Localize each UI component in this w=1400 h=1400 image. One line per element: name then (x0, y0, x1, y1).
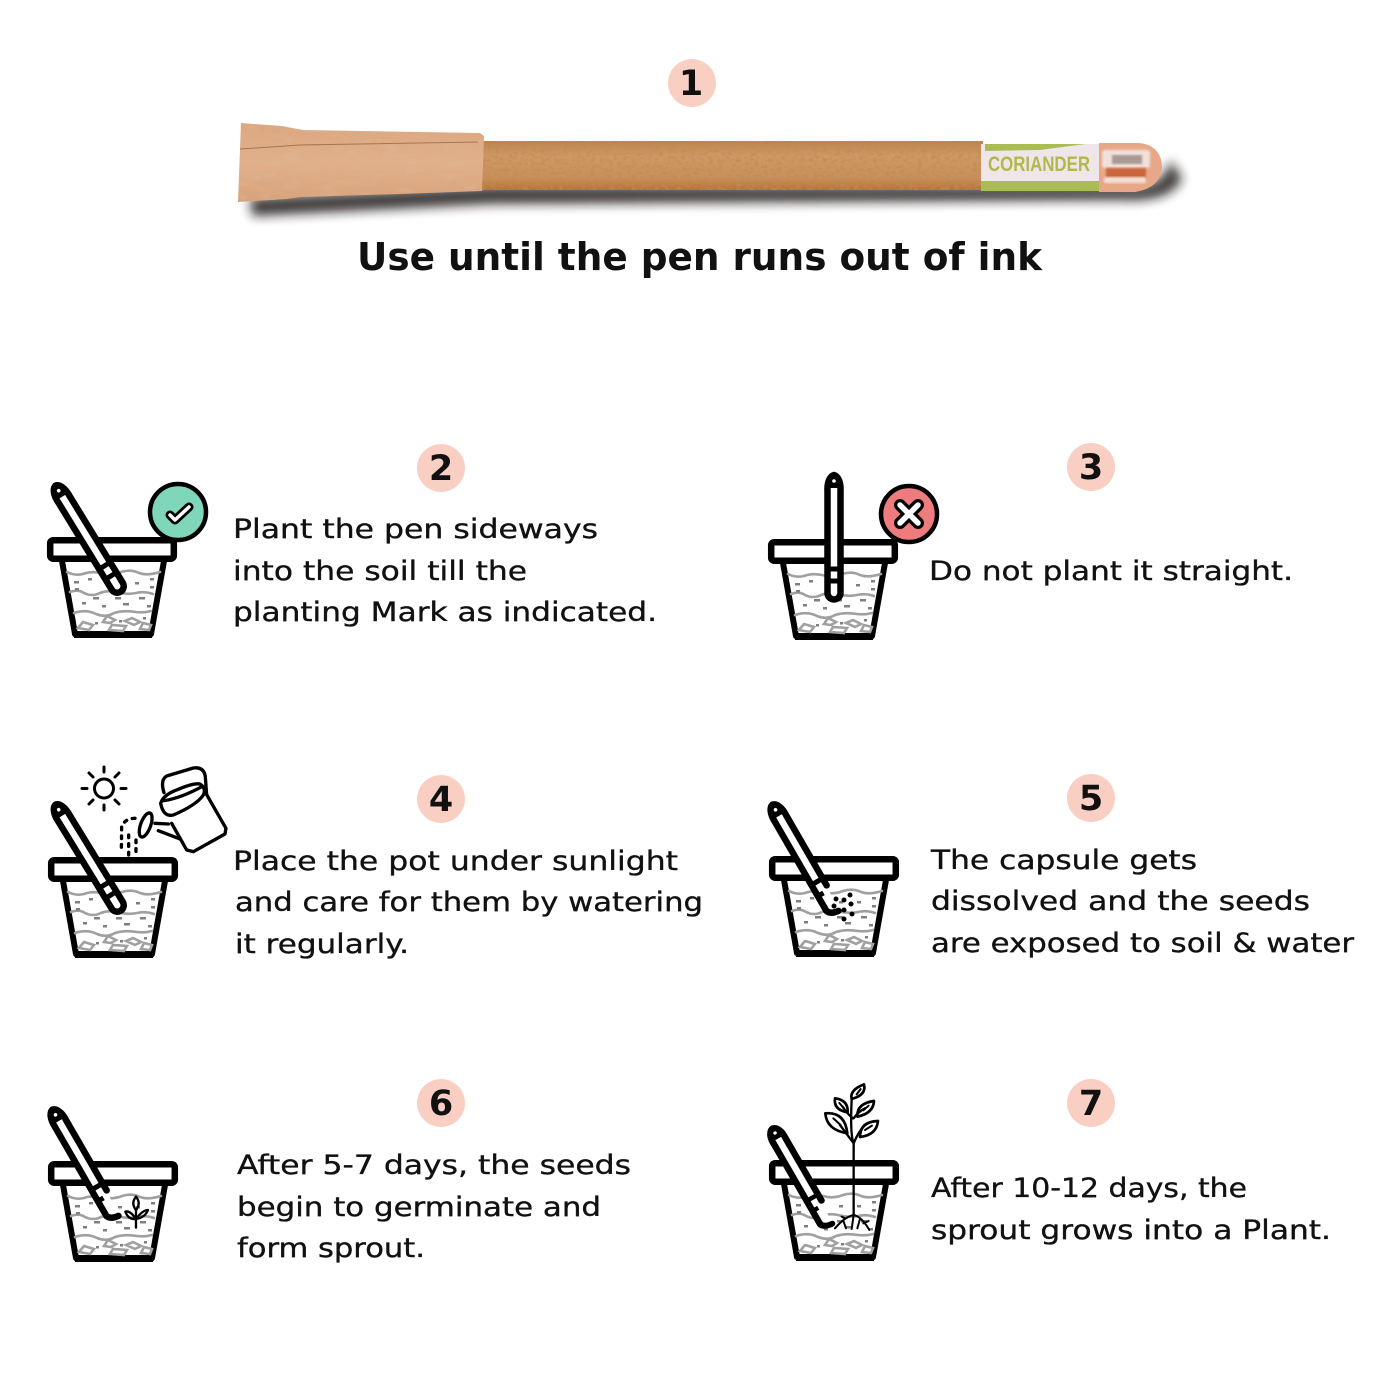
text: step 5 (930, 845, 1355, 959)
number badge 6 (417, 1079, 465, 1127)
icon: pot with pen planted sideways (50, 482, 206, 634)
text: step 2: Plant the pen sideways (233, 514, 598, 545)
text: step 4: and care for them by watering (235, 887, 703, 918)
number badge 5 (1067, 774, 1115, 822)
text: step 6: After 5-7 days, the seeds (237, 1150, 631, 1181)
number badge 7 (1067, 1079, 1115, 1127)
text: step 7: sprout grows into a Plant. (931, 1215, 1331, 1246)
step 7 (767, 1079, 1331, 1258)
text: step 5: are exposed to soil & water (931, 928, 1355, 959)
number badge 5: 5 (1079, 779, 1103, 819)
number badge 4 (417, 775, 465, 823)
number badge 3: 3 (1079, 448, 1103, 488)
text: step 7: After 10-12 days, the (931, 1173, 1247, 1204)
watering can (137, 768, 226, 852)
text: step 6 (237, 1150, 631, 1264)
step 5 (767, 774, 1355, 959)
step 1: pen photo and caption (238, 59, 1182, 279)
text: step 4: it regularly. (235, 929, 409, 960)
number badge 6: 6 (429, 1084, 453, 1124)
number badge 1 (668, 59, 716, 107)
number badge 3 (1067, 443, 1115, 491)
step 6 (47, 1079, 631, 1264)
water drops (121, 818, 136, 857)
step 4 (50, 767, 703, 960)
number badge 2 (417, 444, 465, 492)
icon: pot with dissolved capsule and seeds (767, 801, 896, 954)
text: step 2: planting Mark as indicated. (233, 597, 657, 628)
icon: pot with pen planted straight (771, 475, 937, 636)
step 2 (50, 444, 657, 634)
icon: pot with sun and watering can (50, 767, 226, 954)
number badge 1: 1 (679, 64, 703, 104)
text: step 5: The capsule gets (930, 845, 1197, 876)
text: step 6: begin to germinate and (237, 1192, 601, 1223)
sun (82, 767, 126, 810)
text: step 5: dissolved and the seeds (931, 886, 1310, 917)
icon: pot with grown plant and roots (767, 1084, 896, 1258)
number badge 4: 4 (429, 780, 453, 820)
text: step 3: Do not plant it straight. (929, 556, 1293, 587)
caption: Use until the pen runs out of ink (357, 235, 1043, 279)
number badge 7: 7 (1079, 1084, 1103, 1124)
pen photograph (238, 123, 1182, 216)
step 3 (771, 443, 1293, 636)
number badge 2: 2 (429, 449, 453, 489)
text: step 7 (931, 1173, 1331, 1246)
text: step 2 (233, 514, 657, 628)
text: step 2: into the soil till the (233, 556, 527, 587)
pen photograph: CORIANDER (988, 153, 1090, 176)
text: step 6: form sprout. (237, 1233, 425, 1264)
text: step 4: Place the pot under sunlight (233, 846, 678, 877)
text: step 4 (233, 846, 703, 960)
icon: pot with germinating sprout (47, 1106, 175, 1258)
